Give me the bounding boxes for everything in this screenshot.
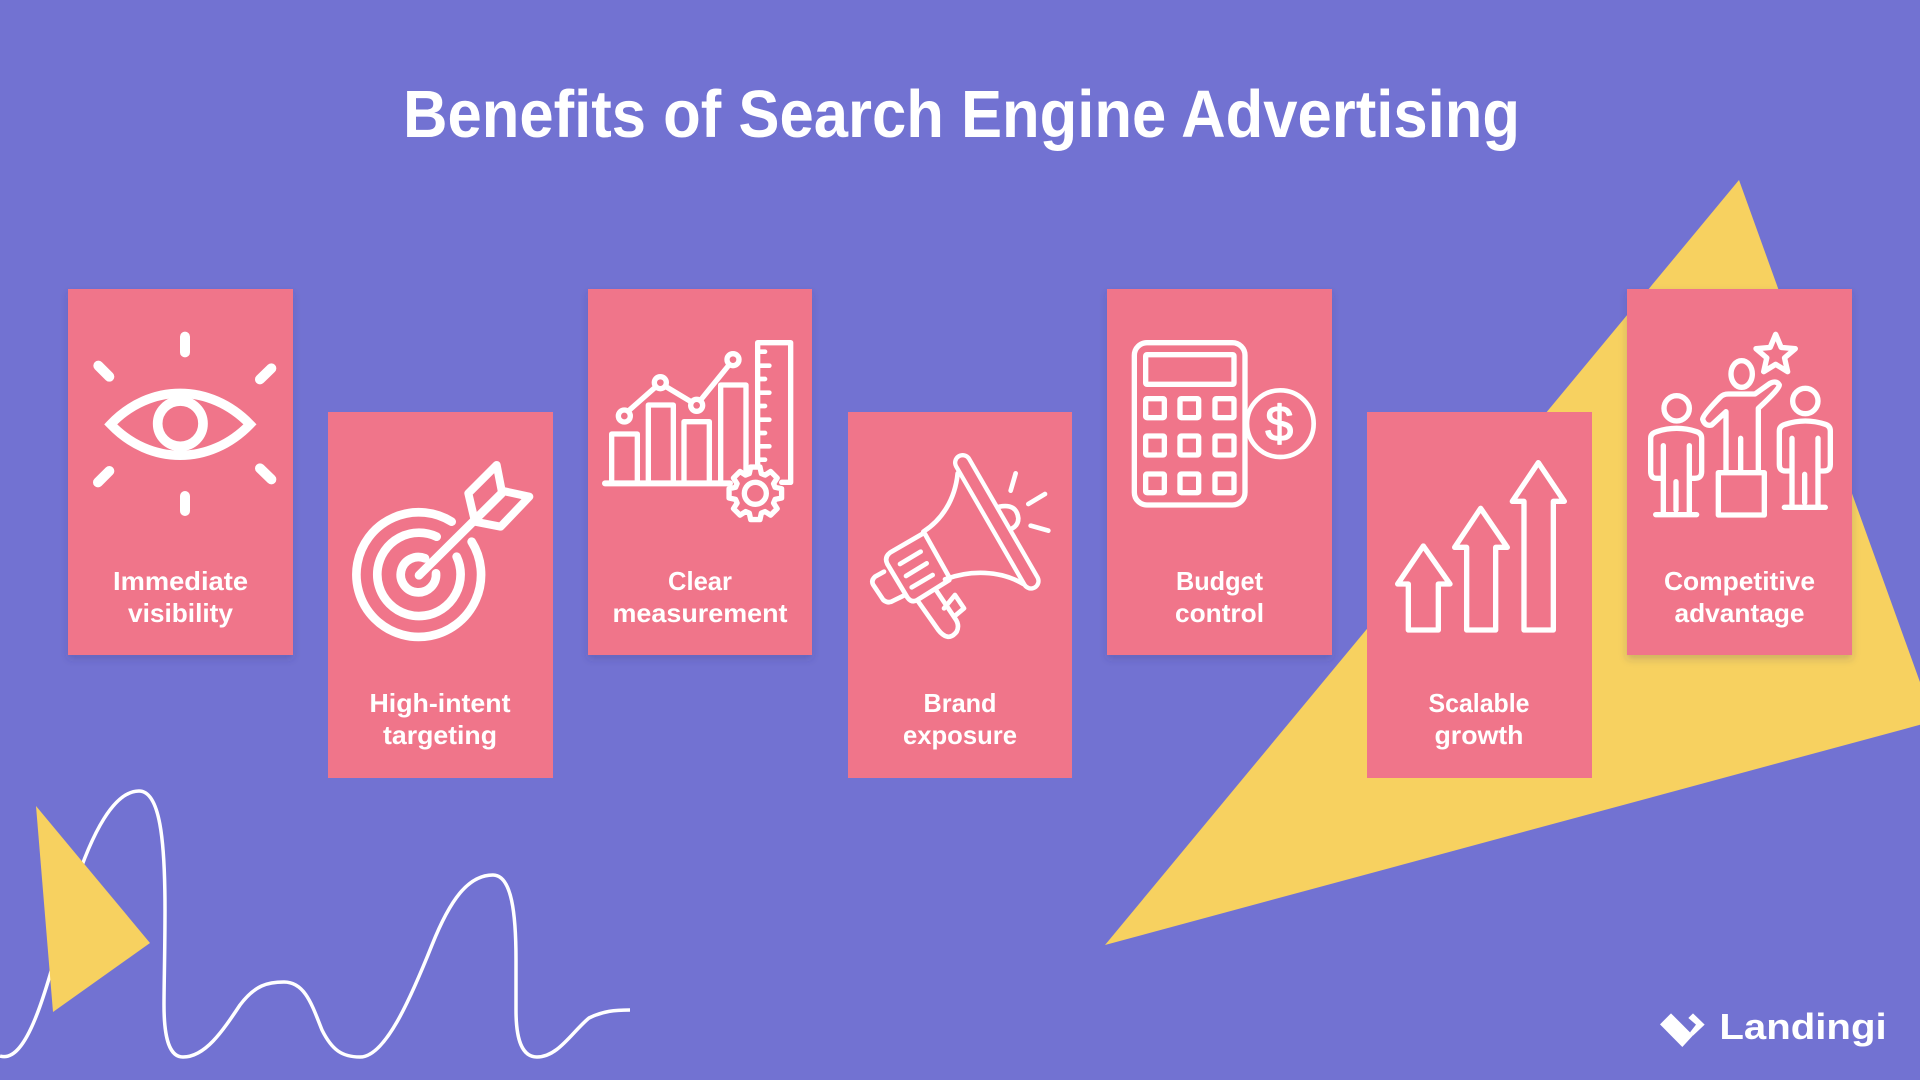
label: exposure bbox=[903, 720, 1017, 750]
small yellow triangle bbox=[36, 806, 150, 1012]
label: Immediate bbox=[113, 566, 248, 596]
title: Benefits of Search Engine Advertising bbox=[403, 77, 1520, 152]
label bbox=[1664, 566, 1815, 628]
label: Clear bbox=[668, 566, 732, 596]
label: targeting bbox=[383, 720, 497, 750]
card background bbox=[848, 412, 1072, 778]
card: scalable growth bbox=[1367, 412, 1592, 778]
icon: chart, ruler and gear bbox=[605, 343, 791, 520]
label bbox=[1175, 566, 1264, 628]
card: high-intent targeting bbox=[328, 412, 553, 778]
wavy line bbox=[0, 791, 630, 1057]
card background bbox=[328, 412, 553, 778]
icon: target with arrow bbox=[356, 465, 529, 637]
label bbox=[370, 688, 511, 750]
card: budget control bbox=[1107, 289, 1332, 655]
label: Budget bbox=[1176, 566, 1263, 596]
label: Brand bbox=[924, 688, 996, 718]
icon: three rising arrows bbox=[1398, 463, 1564, 630]
label: visibility bbox=[128, 598, 234, 628]
logo wordmark: Landingi bbox=[1719, 1006, 1887, 1047]
icon: calculator and coin bbox=[1134, 343, 1314, 505]
card background bbox=[1627, 289, 1852, 655]
card background bbox=[1367, 412, 1592, 778]
logo mark bbox=[1660, 1013, 1705, 1047]
label: growth bbox=[1434, 720, 1524, 750]
label: Competitive bbox=[1664, 566, 1815, 596]
icon: calculator and coin: $ bbox=[1265, 395, 1293, 451]
large yellow triangle bbox=[1105, 180, 1920, 945]
label bbox=[903, 688, 1017, 750]
label bbox=[612, 566, 788, 628]
card: clear measurement bbox=[588, 289, 812, 655]
logo: Landingi bbox=[1660, 1006, 1887, 1047]
card: brand exposure bbox=[848, 412, 1072, 778]
icon: eye bbox=[98, 337, 271, 511]
label: advantage bbox=[1674, 598, 1804, 628]
card background bbox=[1107, 289, 1332, 655]
icon: megaphone bbox=[872, 463, 1048, 637]
label bbox=[113, 566, 248, 628]
label: control bbox=[1175, 598, 1264, 628]
label: High-intent bbox=[370, 688, 511, 718]
icon: people on podium with star bbox=[1651, 334, 1830, 515]
label bbox=[1428, 688, 1530, 750]
card: immediate visibility bbox=[68, 289, 293, 655]
label: measurement bbox=[612, 598, 788, 628]
card background bbox=[588, 289, 812, 655]
card background bbox=[68, 289, 293, 655]
card: competitive advantage bbox=[1627, 289, 1852, 655]
label: Scalable bbox=[1428, 688, 1530, 718]
